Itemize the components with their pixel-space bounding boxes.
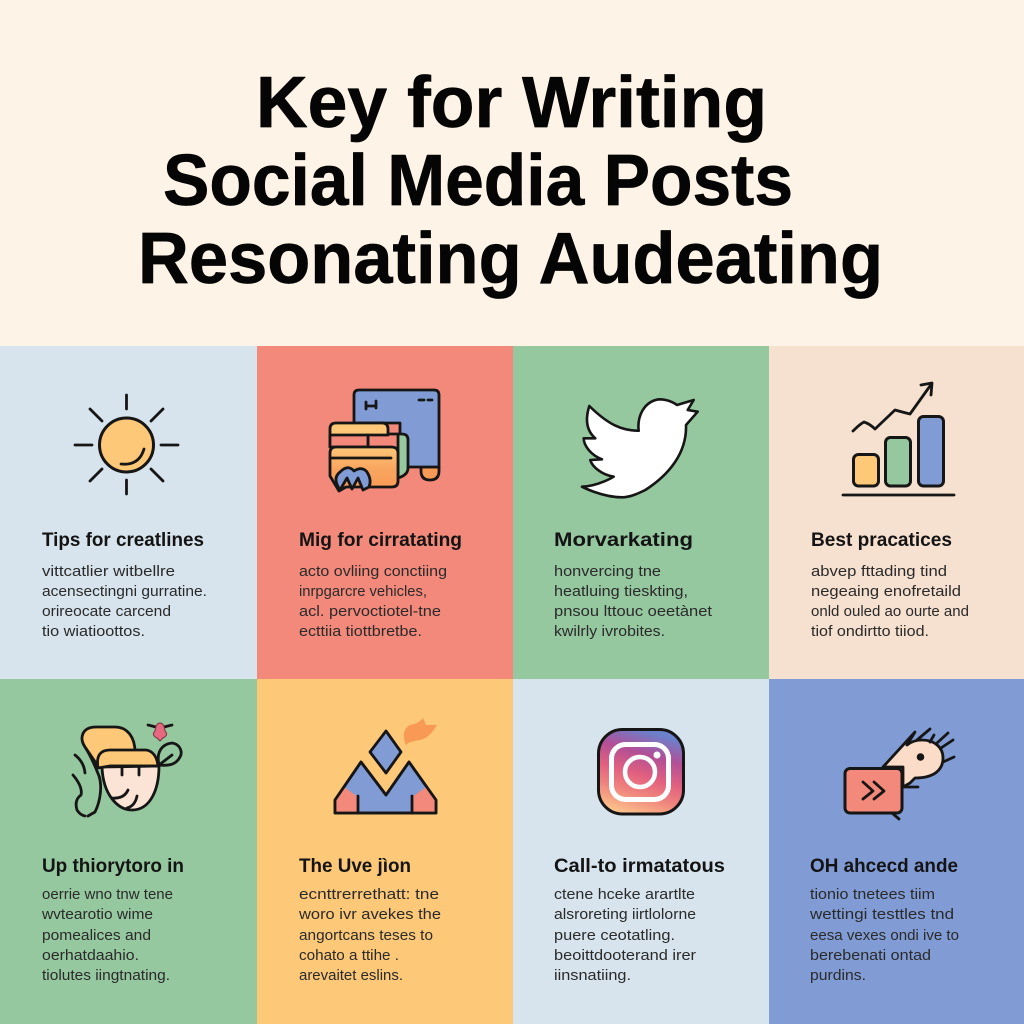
body text: tionio tnetees tiim [810, 887, 935, 903]
title banner [0, 0, 1024, 346]
heading: Morvarkating [554, 530, 693, 551]
body text: acensectingni gurratine. [42, 584, 207, 600]
title: Social Media Posts [163, 141, 793, 221]
body text: negeaing enofretaild [811, 584, 961, 600]
panel: morvarkating [513, 346, 769, 679]
body text [41, 887, 173, 984]
icon: face with leaf and flower [73, 723, 181, 816]
body text: pnsou lttouc oeetànet [554, 604, 712, 620]
body text: beoittdooterand irer [554, 948, 696, 964]
icon: growth chart [843, 383, 954, 495]
icon: camera app [598, 730, 684, 814]
heading: Best pracatices [811, 530, 952, 551]
icon: mountain, diamond and flame [335, 718, 437, 813]
title: Key for Writing [256, 63, 767, 143]
body text: iinsnatiing. [554, 968, 631, 984]
body text: onld ouled ao ourte and [811, 604, 969, 620]
icon: pointing character with arrow box [845, 729, 954, 819]
body text: tio wiatioottos. [42, 624, 145, 640]
body text: acto ovliing conctiing [299, 564, 447, 580]
panel: up thiorytoro in [0, 679, 257, 1024]
body text: alsroreting iirtlolorne [554, 907, 696, 923]
heading: OH ahcecd ande [810, 856, 958, 877]
body text: honvercing tne [554, 564, 661, 580]
body text [299, 564, 447, 640]
body text: abvep fttading tind [811, 564, 947, 580]
body text: ecttiia tiottbretbe. [299, 624, 422, 640]
heading: Up thiorytoro in [42, 856, 184, 877]
body text [554, 564, 712, 640]
body text: kwilrly ivrobites. [554, 624, 665, 640]
body text [298, 887, 441, 984]
body text: wettingi testtles tnd [809, 907, 954, 923]
body text: oerrie wno tnw tene [42, 887, 173, 903]
body text: vittcatlier witbellre [42, 564, 175, 580]
body text: wvtearotio wime [41, 907, 153, 923]
body text [811, 564, 969, 640]
panel: tips for creatlines [0, 346, 257, 679]
body text: eesa vexes ondi ive to [810, 928, 959, 944]
body text: purdins. [810, 968, 866, 984]
body text: pomealices and [42, 928, 151, 944]
icon: stacked cards [330, 390, 439, 491]
body text: tiolutes iingtnating. [42, 968, 170, 984]
body text: oerhatdaahio. [42, 948, 139, 964]
body text: arevaitet eslins. [299, 968, 403, 984]
heading: Mig for cirratating [299, 530, 462, 551]
heading: Tips for creatlines [42, 530, 204, 551]
body text [809, 887, 959, 984]
body text: heatluing tieskting, [554, 584, 688, 600]
body text: puere ceotatling. [554, 928, 675, 944]
body text: angortcans teses to [299, 928, 433, 944]
body text: tiof ondirtto tiiod. [811, 624, 929, 640]
body text: cohato a ttihe . [299, 948, 399, 964]
body text [42, 564, 207, 640]
icon: sun [75, 395, 178, 494]
panel: oh ahcecd ande [769, 679, 1024, 1024]
body text: inrpgarcre vehicles, [299, 584, 427, 600]
title [138, 63, 883, 299]
body text: ecnttrerrethatt: tne [299, 887, 439, 903]
body text: berebenati ontad [810, 948, 931, 964]
panel: call-to irmatatous [513, 679, 769, 1024]
heading: Call-to irmatatous [554, 856, 725, 877]
body text: woro ivr avekes the [298, 907, 441, 923]
body text: ctene hceke arartlte [554, 887, 695, 903]
body text: acl. pervoctiotel-tne [299, 604, 441, 620]
icon: bird [582, 399, 698, 497]
panel: mig for cirratating [257, 346, 513, 679]
panel: best pracatices [769, 346, 1024, 679]
heading: The Uve jìon [299, 856, 411, 877]
title: Resonating Audeating [138, 219, 883, 299]
body text: orireocate carcend [42, 604, 171, 620]
panel: the uve jion [257, 679, 513, 1024]
body text [554, 887, 696, 984]
